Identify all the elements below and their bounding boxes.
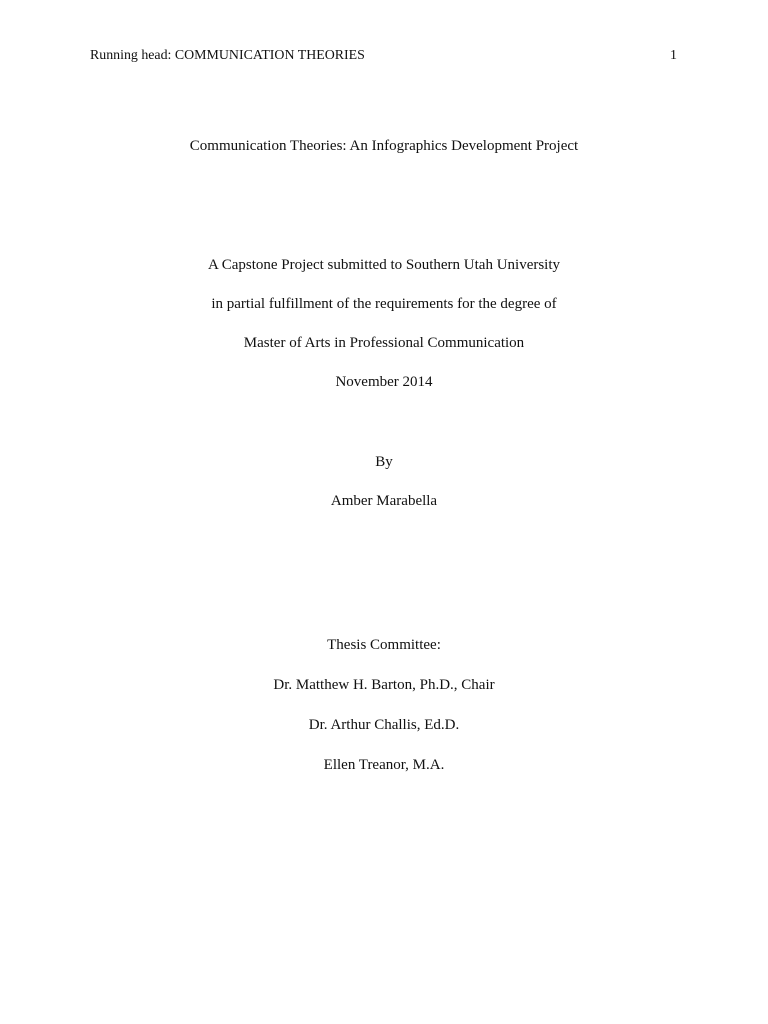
thesis committee: Dr. Matthew H. Barton, Ph.D., Chair: [273, 677, 495, 693]
author: By: [375, 454, 393, 470]
submission statement: in partial fulfillment of the requirements for the degree of: [211, 296, 557, 312]
author: [331, 454, 437, 509]
thesis committee: [273, 637, 495, 773]
submission statement: Master of Arts in Professional Communication: [244, 335, 524, 351]
author: Amber Marabella: [331, 493, 437, 509]
thesis committee: Dr. Arthur Challis, Ed.D.: [309, 717, 459, 733]
running head: Running head: COMMUNICATION THEORIES: [90, 48, 365, 63]
submission statement: A Capstone Project submitted to Southern Utah University: [208, 257, 560, 273]
page number: 1: [670, 48, 677, 63]
thesis committee: Ellen Treanor, M.A.: [324, 757, 444, 773]
title: Communication Theories: An Infographics Development Project: [190, 138, 578, 154]
submission statement: November 2014: [335, 374, 433, 390]
submission statement: [208, 257, 560, 390]
thesis committee: Thesis Committee:: [327, 637, 441, 653]
